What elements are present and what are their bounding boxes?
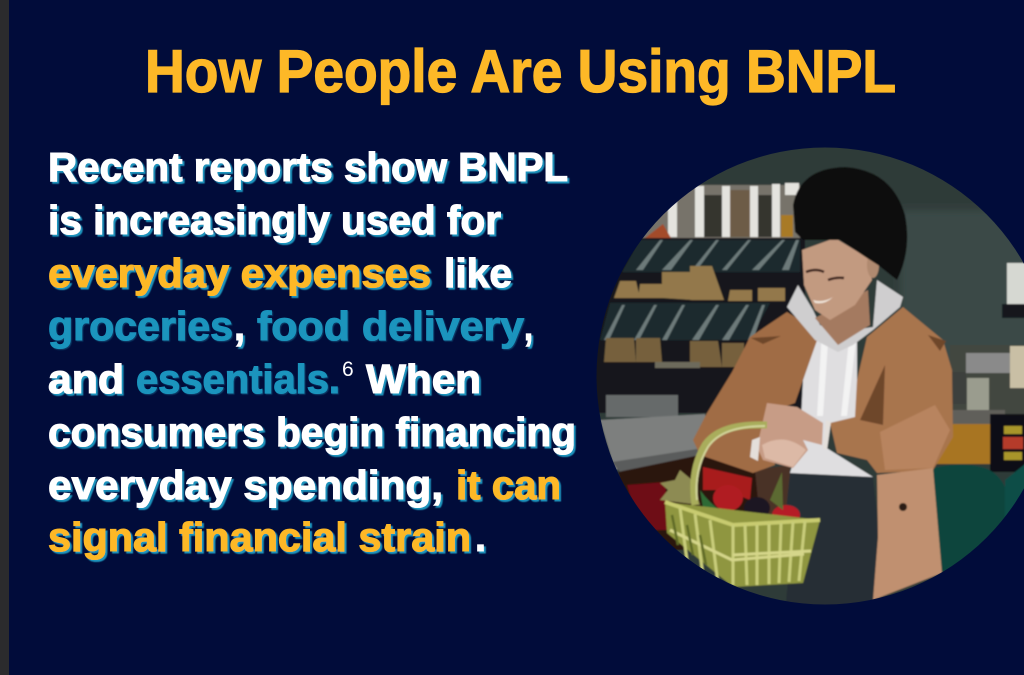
hands: [750, 403, 831, 468]
produce in basket: [660, 467, 800, 525]
body paragraph: groceries: [48, 303, 233, 349]
jars on top shelf: [640, 183, 800, 238]
body paragraph: like: [444, 250, 512, 296]
body paragraph: 6: [342, 358, 354, 381]
trousers: [785, 472, 880, 610]
body paragraph: everyday spending,: [48, 462, 443, 508]
dark strap behind basket: [754, 466, 790, 514]
counter: [600, 414, 760, 550]
green chair: [934, 464, 1024, 572]
right side shelf items: [935, 263, 1024, 472]
face and neck: [802, 238, 879, 345]
basket: [665, 425, 820, 587]
hoodie torso: [790, 330, 873, 477]
title: How People Are Using BNPL: [145, 38, 896, 105]
photo: woman holding a grocery basket: [590, 140, 1024, 610]
hair: [793, 167, 907, 280]
wall: [590, 140, 1024, 610]
body paragraph: .: [475, 514, 486, 560]
body paragraph: consumers begin financing: [48, 409, 576, 455]
body paragraph: ,: [524, 303, 533, 349]
body paragraph: and: [48, 356, 124, 402]
body paragraph: ,: [234, 303, 245, 349]
coat: [693, 307, 953, 600]
shelf bins: [590, 238, 805, 417]
body paragraph: Recent reports show BNPL: [48, 144, 568, 190]
body paragraph: essentials.: [136, 356, 340, 402]
body paragraph: it can: [456, 462, 561, 508]
body paragraph: When: [366, 356, 481, 402]
body paragraph: [48, 144, 576, 560]
hood: [787, 280, 903, 352]
body paragraph: everyday expenses: [48, 250, 431, 296]
body paragraph: is increasingly used for: [48, 197, 501, 243]
body paragraph: food delivery: [257, 303, 524, 349]
body paragraph: signal financial strain: [48, 514, 471, 560]
